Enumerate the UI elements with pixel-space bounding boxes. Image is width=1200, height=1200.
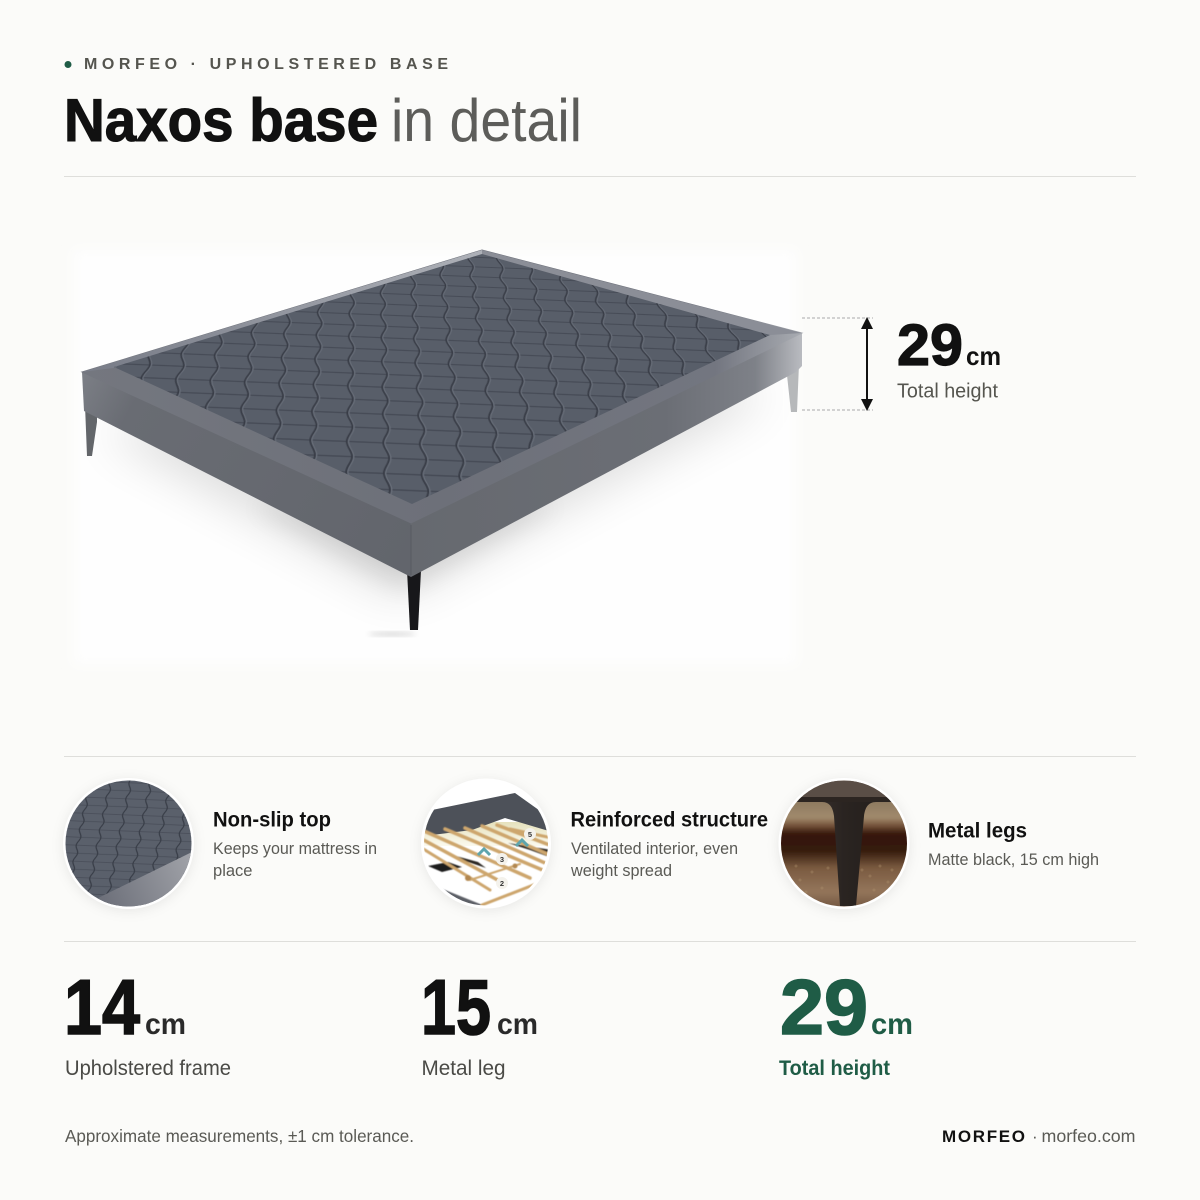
product photo: upholstered base — [74, 250, 802, 664]
icon: quilted top photo — [62, 780, 195, 912]
title: Naxos base — [64, 87, 378, 154]
stat: metal leg: cm — [497, 1008, 538, 1041]
stat: total height — [779, 963, 913, 1080]
stat: metal leg: Metal leg — [422, 1057, 506, 1080]
numbered badges: 5 — [528, 830, 532, 839]
stat: upholstered frame: cm — [145, 1008, 186, 1041]
airflow arrows — [478, 840, 528, 855]
frame top — [82, 250, 802, 523]
feature text: Non-slip top — [213, 808, 331, 832]
height value: cm — [966, 341, 1001, 371]
footer brand: · — [1032, 1127, 1038, 1146]
numbered badges: 2 — [500, 879, 504, 888]
feature text: Metal legs — [928, 820, 1027, 842]
feature text — [570, 808, 768, 880]
stat: total height: Total height — [779, 1057, 890, 1080]
numbered badges — [496, 828, 536, 889]
stat: total height: cm — [871, 1008, 913, 1041]
feature text: Ventilated interior, even — [571, 839, 738, 858]
height value: Total height — [897, 380, 998, 402]
height dimension — [802, 317, 873, 411]
eyebrow: MORFEO · UPHOLSTERED BASE — [84, 56, 448, 73]
icon: metal leg photo — [778, 780, 910, 912]
feature text: Reinforced structure — [570, 808, 768, 832]
footnote: Approximate measurements, ±1 cm tolerance. — [65, 1126, 414, 1146]
stat: upholstered frame: Upholstered frame — [65, 1057, 231, 1080]
footer brand: MORFEO — [942, 1127, 1025, 1146]
height value — [897, 313, 1001, 402]
numbered badges: 3 — [500, 855, 504, 864]
feature text — [928, 820, 1099, 869]
title — [64, 87, 582, 154]
base sides — [82, 333, 802, 577]
floor shadow — [100, 340, 770, 636]
title: in detail — [391, 87, 582, 154]
feature text — [213, 808, 377, 880]
stat: metal leg — [421, 963, 538, 1080]
quilted top panel — [114, 254, 770, 504]
feature: metal legs — [770, 778, 1099, 910]
feature: reinforced structure — [420, 793, 768, 912]
feature text: Keeps your mattress in — [213, 839, 377, 858]
stat: upholstered frame — [64, 963, 231, 1080]
stat: metal leg: 15 — [421, 963, 491, 1051]
legs — [85, 364, 799, 630]
footer brand — [942, 1126, 1136, 1146]
stat: total height: 29 — [780, 963, 868, 1051]
feature: non-slip top — [60, 775, 377, 915]
icon: slatted structure photo — [420, 793, 552, 912]
feature text: Matte black, 15 cm high — [928, 850, 1099, 869]
feature text: place — [213, 861, 252, 880]
footer brand: morfeo.com — [1042, 1126, 1136, 1146]
height value: 29 — [897, 313, 963, 378]
feature text: weight spread — [570, 861, 672, 880]
stat: upholstered frame: 14 — [64, 963, 140, 1051]
